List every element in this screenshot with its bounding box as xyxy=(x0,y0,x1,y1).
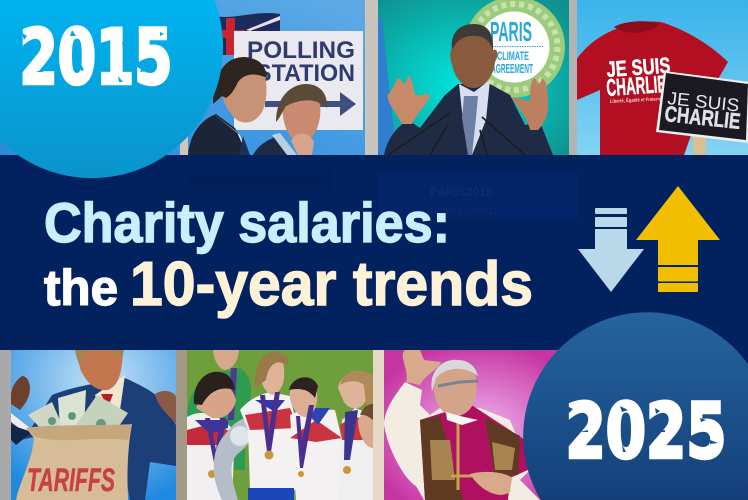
photo: Je suis Charlie xyxy=(576,0,748,155)
sack with TARIFFS xyxy=(16,424,132,500)
title line 2: the: the xyxy=(44,260,118,316)
player 5 xyxy=(358,404,373,448)
UN flag xyxy=(378,18,394,155)
wooden stick xyxy=(693,135,706,155)
black sign: JE SUIS xyxy=(667,88,740,116)
trophy xyxy=(214,418,248,500)
divider xyxy=(176,350,187,500)
badge: 2025 xyxy=(523,312,748,500)
player 3 xyxy=(289,377,342,500)
divider xyxy=(373,350,384,500)
man right xyxy=(253,84,327,155)
player 4 xyxy=(338,371,373,500)
polling sign: POLLING xyxy=(247,37,355,64)
man left xyxy=(188,57,267,155)
pope figure xyxy=(384,350,540,500)
photo: tariffs xyxy=(11,350,176,500)
polling sign xyxy=(234,31,363,130)
title line 2: 10-year trends: 10-year trends xyxy=(130,250,533,319)
photo: Paris climate agreement xyxy=(374,0,569,155)
icon: up arrow xyxy=(636,186,720,292)
sack with TARIFFS: TARIFFS xyxy=(27,462,115,498)
divider xyxy=(0,350,11,500)
banknotes xyxy=(28,390,128,426)
Paris logo: AGREEMENT xyxy=(491,61,533,76)
man in blue suit xyxy=(11,350,176,500)
divider xyxy=(569,0,577,155)
photo: England footballers xyxy=(187,350,373,500)
Paris logo xyxy=(464,0,565,98)
red t-shirt: JE SUIS xyxy=(606,53,671,82)
red t-shirt: CHARLIE xyxy=(606,71,667,102)
icon: down arrow xyxy=(578,208,644,292)
player 2 xyxy=(240,352,300,500)
photo: pope xyxy=(384,350,574,500)
red t-shirt: Liberté, Égalité et Fraternité xyxy=(610,94,665,105)
title line 1: Charity salaries: xyxy=(44,191,450,254)
speaker xyxy=(384,24,553,155)
badge: 2015 xyxy=(0,0,223,178)
photo: polling station xyxy=(0,0,365,155)
goalkeeper xyxy=(187,350,251,470)
polling sign: STATION xyxy=(256,60,355,87)
red t-shirt xyxy=(576,21,728,155)
Paris logo: CLIMATE xyxy=(497,49,529,63)
faint photo echoes: PARIS2015 xyxy=(430,185,493,199)
player 1 xyxy=(187,372,236,500)
Paris logo: PARIS xyxy=(490,16,532,47)
faint photo echoes xyxy=(0,170,578,350)
dark blue band xyxy=(0,155,748,350)
union flag xyxy=(215,13,280,55)
divider pole xyxy=(365,0,378,155)
badge: 2015: 2015 xyxy=(20,12,172,102)
black sign xyxy=(656,71,748,143)
faint photo echoes: COP21 CMP11 xyxy=(430,206,499,217)
title xyxy=(44,191,533,319)
